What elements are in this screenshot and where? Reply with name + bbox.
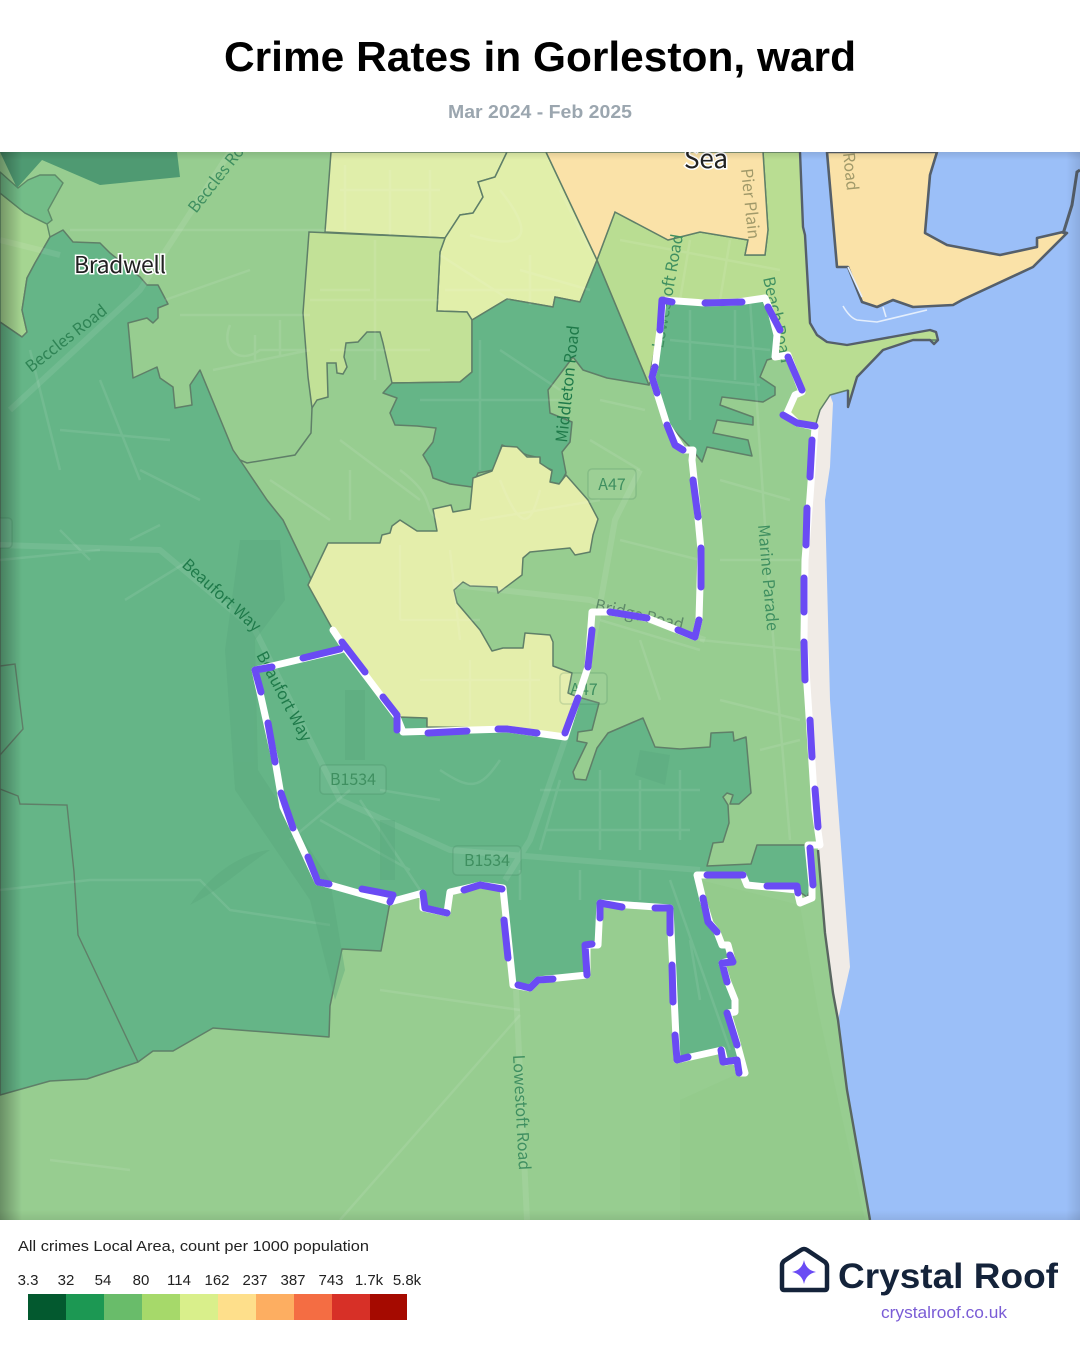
coastline: south — [818, 850, 870, 1220]
legend scale labels: 743 — [318, 1272, 344, 1289]
label: Lowestoft Road north: Lowestoft Road — [644, 232, 688, 350]
label: Lowestoft Road south: Lowestoft Road — [508, 1054, 538, 1171]
logo mark and wordmark: Crystal Roof — [838, 1257, 1058, 1296]
road tag: west edge — [0, 518, 12, 548]
area: Great Yarmouth orange zone — [546, 152, 768, 260]
area: top-left lighter zone — [0, 193, 50, 337]
ward boundary: purple dashes — [255, 300, 818, 1073]
label: Marine Parade: Marine Parade — [753, 523, 786, 632]
legend scale labels — [18, 1272, 422, 1289]
legend scale labels: 54 — [95, 1272, 111, 1289]
label: Middleton Road: Middleton Road — [548, 324, 584, 444]
legend scale labels: 114 — [167, 1272, 191, 1289]
road tag: B1534 central: B1534 — [464, 847, 510, 871]
label: Beccles Road west: Beccles Road — [19, 298, 111, 377]
area: olive zone — [303, 232, 472, 408]
subtitle: date range: Mar 2024 - Feb 2025 — [448, 102, 632, 122]
area: darker southern fields — [680, 880, 865, 1220]
label: Pier Plain: Pier Plain — [736, 167, 767, 240]
area: upper yellow zone — [325, 152, 507, 238]
area: Middleton Road dark zone — [383, 260, 649, 487]
legend scale labels: 80 — [133, 1272, 149, 1289]
title: Crime Rates in Gorleston, ward — [224, 33, 856, 80]
road tag: A47 north: A47 — [598, 471, 626, 495]
legend scale labels: 387 — [280, 1272, 306, 1289]
area: outline of central-west zone — [240, 408, 312, 463]
legend — [18, 1238, 422, 1320]
website: crystalroof.co.uk — [881, 1304, 1008, 1322]
coastline: harbour mole — [1063, 170, 1080, 234]
legend scale labels: 32 — [58, 1272, 74, 1289]
road tag: B1534 west: B1534 — [330, 766, 376, 790]
legend title: All crimes Local Area, count per 1000 population — [18, 1238, 369, 1255]
area: sea — [800, 152, 1080, 1220]
legend colour bar — [28, 1294, 407, 1320]
ward boundary: white line — [255, 298, 820, 1073]
area: northern corridor zone and harbour spit — [597, 152, 938, 427]
legend scale labels: 1.7k — [355, 1272, 384, 1289]
road tag: A47 north — [588, 469, 636, 499]
legend scale labels: 237 — [242, 1272, 268, 1289]
map panel — [0, 152, 1080, 1220]
piers — [843, 267, 927, 322]
road tag: A47 south — [560, 673, 607, 704]
area: top-left medium green patch — [0, 172, 63, 224]
logo: Crystal Roof — [780, 1246, 1058, 1322]
map edge shading — [0, 152, 1080, 1220]
label: Road east bank: Road — [838, 152, 866, 192]
area: western and southern ward zone — [0, 230, 812, 1095]
legend scale labels: 5.8k — [393, 1272, 422, 1289]
area: central yellow zone — [308, 446, 598, 737]
area: north yellow zone — [437, 152, 597, 320]
logo mark and wordmark — [780, 1246, 1058, 1296]
place label: Bradwell: Bradwell — [74, 246, 166, 280]
legend scale labels: 3.3 — [18, 1272, 38, 1289]
area: beach — [804, 390, 870, 1020]
label: Beaufort Way west: Beaufort Way — [178, 552, 268, 637]
area: Gorleston north-east ward zone — [650, 300, 778, 462]
legend scale labels: 162 — [204, 1272, 230, 1289]
inner outlines western zones — [0, 664, 138, 1062]
label: Beaufort Way east: Beaufort Way — [252, 646, 320, 746]
street network — [0, 152, 800, 1220]
dark tree belts — [190, 540, 670, 1000]
road tag: B1534 west — [320, 765, 386, 794]
road tag: A47 south: A47 — [570, 676, 598, 700]
label: Bridge Road: Bridge Road — [593, 591, 687, 635]
label: Beach Road: Beach Road — [758, 274, 800, 365]
area: top-left dark zone — [0, 152, 180, 188]
road tag: B1534 central — [453, 846, 521, 875]
area: east-bank orange zone — [827, 152, 1067, 307]
coastline: west harbour bank and spit — [800, 152, 938, 407]
